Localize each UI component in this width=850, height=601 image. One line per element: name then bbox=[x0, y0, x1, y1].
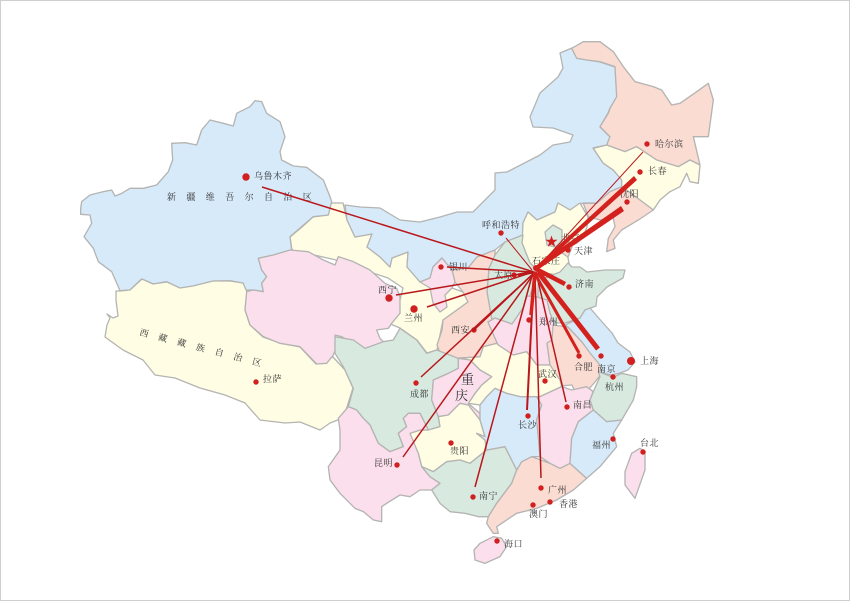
label: Chongqing: 重 bbox=[461, 372, 475, 387]
province: Jiangxi bbox=[537, 387, 593, 468]
city labels: 西安 bbox=[451, 324, 470, 335]
province: Sichuan bbox=[335, 328, 458, 452]
city labels: 银川 bbox=[449, 261, 468, 272]
label: Xinjiang autonomous region: 新疆维吾尔自治区 bbox=[167, 191, 322, 202]
province group: far west bbox=[81, 101, 332, 292]
city labels: 南京 bbox=[597, 363, 616, 374]
city labels: 西宁 bbox=[378, 284, 397, 295]
city labels: 澳门 bbox=[529, 508, 548, 519]
city dots bbox=[242, 141, 650, 544]
city labels: 兰州 bbox=[404, 312, 423, 323]
province group: south bbox=[328, 328, 645, 563]
city labels: 福州 bbox=[592, 439, 611, 450]
label: Chongqing: 庆 bbox=[455, 388, 469, 403]
city labels: 郑州 bbox=[539, 316, 558, 327]
province: Hubei bbox=[458, 343, 562, 405]
city labels: 台北 bbox=[640, 437, 659, 448]
province: Shaanxi bbox=[437, 250, 498, 358]
city labels bbox=[254, 138, 684, 549]
city labels: 呼和浩特 bbox=[482, 219, 520, 230]
province: Tibet bbox=[105, 279, 353, 430]
province: Taiwan bbox=[625, 448, 645, 498]
province: Guangxi bbox=[422, 447, 517, 517]
city labels: 合肥 bbox=[574, 361, 593, 372]
province: Guangdong bbox=[487, 457, 587, 533]
city labels: 杭州 bbox=[605, 381, 624, 392]
city labels: 长春 bbox=[648, 165, 667, 176]
city labels: 长沙 bbox=[518, 419, 538, 430]
city labels: 海口 bbox=[504, 538, 523, 549]
map: provinces bbox=[81, 42, 713, 563]
city labels: 乌鲁木齐 bbox=[254, 170, 292, 181]
province: Beijing bbox=[545, 225, 562, 247]
icon: Beijing star bbox=[546, 236, 558, 247]
city labels: 广州 bbox=[548, 484, 567, 495]
province: Hebei bbox=[522, 203, 588, 275]
label: Tibet autonomous region: 西藏藏族自治区 bbox=[138, 326, 273, 371]
label: Chongqing bbox=[455, 372, 475, 403]
province: Qinghai bbox=[245, 250, 400, 364]
city labels: 成都 bbox=[410, 388, 429, 399]
province: Guizhou bbox=[410, 403, 487, 472]
city labels: 香港 bbox=[559, 498, 578, 509]
city labels: 哈尔滨 bbox=[655, 138, 684, 149]
province: Hainan bbox=[474, 537, 507, 563]
city labels: 济南 bbox=[575, 278, 594, 289]
flow lines from hub bbox=[262, 152, 643, 487]
city labels: 太原 bbox=[494, 269, 513, 280]
province: Jilin bbox=[593, 145, 700, 210]
province: Jiangsu bbox=[565, 308, 635, 375]
province: Heilongjiang bbox=[572, 42, 713, 167]
city labels: 天津 bbox=[574, 245, 593, 256]
province: Zhejiang bbox=[590, 372, 637, 422]
province: Fujian bbox=[570, 410, 622, 478]
province: Hunan bbox=[477, 388, 542, 470]
city labels: 石家庄 bbox=[532, 255, 561, 266]
province: Yunnan bbox=[328, 407, 440, 522]
city labels: 上海 bbox=[640, 355, 659, 366]
city labels: 沈阳 bbox=[620, 188, 639, 199]
city labels: 南宁 bbox=[479, 490, 498, 501]
city labels: 北京 bbox=[561, 232, 580, 243]
province group: Qinghai bbox=[245, 250, 400, 364]
province group: northeast bbox=[572, 42, 713, 252]
province: Henan bbox=[488, 296, 555, 365]
city labels: 拉萨 bbox=[263, 373, 282, 384]
city labels: 贵阳 bbox=[450, 445, 469, 456]
province: Anhui bbox=[547, 325, 602, 392]
province: Shandong bbox=[538, 263, 625, 323]
province: Gansu bbox=[290, 203, 468, 353]
province: Tianjin bbox=[562, 242, 572, 257]
province: Shanxi bbox=[487, 235, 540, 324]
province: Chongqing bbox=[432, 358, 492, 420]
city labels: 武汉 bbox=[538, 368, 557, 379]
city labels: 昆明 bbox=[374, 458, 393, 468]
city labels: 南昌 bbox=[573, 399, 592, 410]
province: Liaoning bbox=[583, 187, 653, 252]
province: Inner Mongolia bbox=[345, 48, 622, 282]
province: Xinjiang bbox=[81, 101, 332, 292]
province: Ningxia bbox=[420, 258, 455, 312]
